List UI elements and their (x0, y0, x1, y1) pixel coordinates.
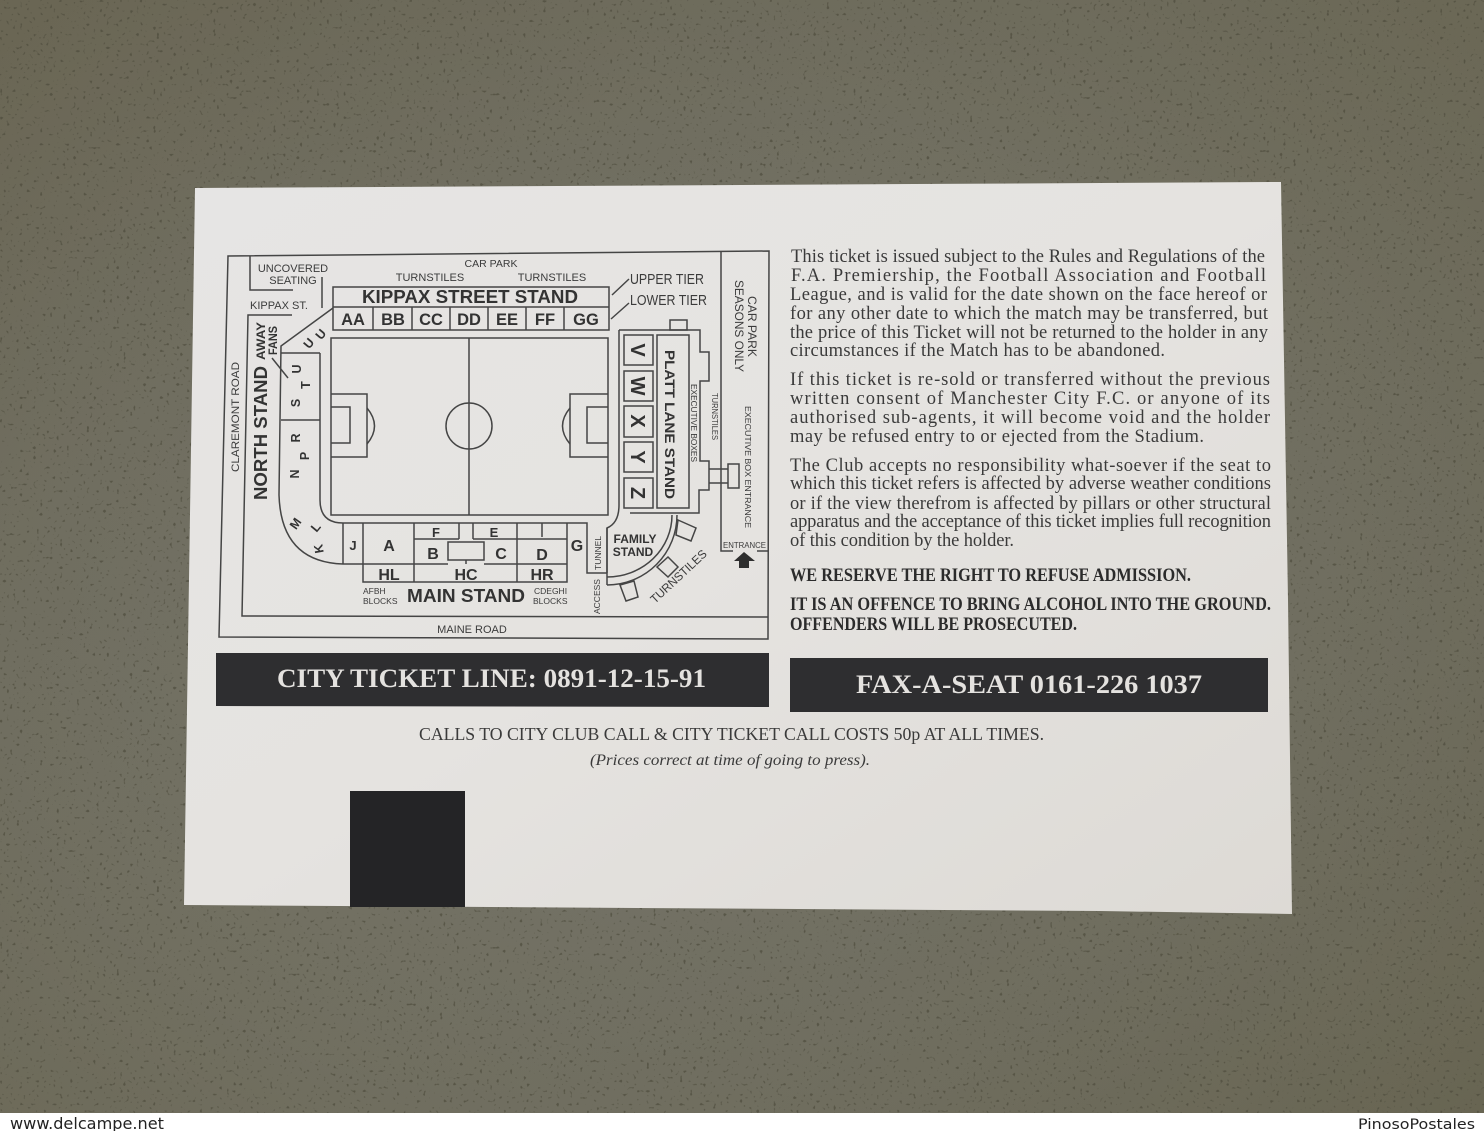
paragraph: rules and regulations: circumstances if the Match has to be abandoned. (790, 341, 1165, 361)
map labels: CAR PARK (465, 258, 517, 270)
Main Stand: HR (530, 567, 554, 584)
Kippax Street Stand: DD (457, 311, 481, 329)
icon: entrance arrow (734, 552, 755, 568)
Kippax Street Stand: EE (496, 311, 518, 329)
paragraph: rules and regulations: League, and is valid for the date shown on the face hereof or (790, 285, 1267, 305)
notice: alcohol: IT IS AN OFFENCE TO BRING ALCOHOL INTO THE GROUND. (790, 595, 1271, 615)
executive box entrance connector (709, 406, 753, 528)
North Stand: U (313, 326, 329, 342)
North Stand: T (299, 381, 313, 389)
paragraph: resale: written consent of Manchester City F.C. or anyone of its (790, 389, 1270, 409)
map labels: ENTRANCE (723, 541, 766, 550)
stadium map (219, 251, 769, 639)
North Stand: L (308, 520, 324, 535)
footer strip (0, 1113, 1484, 1131)
North Stand: R (289, 433, 303, 443)
North Stand: AWAY (254, 322, 268, 360)
Kippax Street Stand: AA (341, 311, 365, 329)
map labels: LOWER TIER (630, 293, 707, 309)
paragraph: rules and regulations: the price of this Ticket will not be returned to the holder in any (790, 323, 1269, 343)
paragraph: club responsibility: or if the view therefrom is affected by pillars or other structural (790, 494, 1271, 514)
Main Stand: ACCESS (592, 579, 602, 614)
Kippax Street Stand (333, 286, 609, 330)
paragraph: resale (790, 370, 1270, 447)
map labels: MAINE ROAD (437, 624, 507, 636)
Main Stand: CDEGHI (534, 586, 567, 596)
Platt Lane Stand: PLATT LANE STAND (662, 350, 678, 499)
Platt Lane Stand: V (626, 343, 648, 357)
paragraph: resale: authorised sub-agents, it will become void and the holder (790, 408, 1270, 428)
North Stand: N (288, 469, 302, 479)
banner: fax-a-seat (790, 658, 1268, 712)
map labels: TURNSTILES (518, 272, 586, 284)
paragraph: club responsibility: which this ticket refers is affected by adverse weather conditions (790, 474, 1271, 494)
Main Stand: J (349, 538, 357, 553)
Main Stand: F (432, 525, 440, 540)
call cost note: CALLS TO CITY CLUB CALL & CITY TICKET CALL COSTS 50p AT ALL TIMES. (419, 724, 1044, 744)
map labels: SEATING (269, 275, 317, 287)
Main Stand: AFBH (363, 586, 386, 596)
ticket card (184, 182, 1292, 914)
price note: (Prices correct at time of going to press). (590, 752, 870, 769)
Platt Lane Stand (607, 320, 719, 573)
Main Stand: G (571, 538, 583, 555)
notice: alcohol (790, 595, 1271, 635)
North Stand: FANS (266, 326, 280, 355)
Main Stand: HL (378, 567, 400, 584)
paragraph: rules and regulations: for any other date to which the match may be transferred, but (790, 304, 1269, 324)
notice: admission: WE RESERVE THE RIGHT TO REFUSE ADMISSION. (790, 566, 1191, 586)
banner: city ticket line (216, 653, 769, 707)
Main Stand: D (536, 547, 548, 564)
Family Stand: FAMILY (614, 532, 656, 546)
map labels: SEASONS ONLY (732, 280, 746, 372)
Main Stand: BLOCKS (533, 596, 568, 606)
paragraph: rules and regulations: F.A. Premiership, the Football Association and Football (791, 266, 1266, 286)
Platt Lane Stand: TURNSTILES (710, 393, 719, 440)
map labels: KIPPAX ST. (250, 300, 308, 312)
Family Stand: TURNSTILES (647, 547, 710, 606)
banner: city ticket line: CITY TICKET LINE: 0891-12-15-91 (277, 664, 706, 693)
map labels: TURNSTILES (396, 272, 464, 284)
North Stand: K (311, 543, 327, 554)
pitch (331, 338, 608, 515)
Kippax Street Stand: FF (535, 311, 555, 329)
Kippax Street Stand: CC (419, 311, 443, 329)
paragraph: rules and regulations (790, 247, 1269, 361)
terms and conditions text (790, 247, 1271, 635)
North Stand: P (298, 452, 312, 460)
Platt Lane Stand: Y (626, 450, 648, 464)
North Stand (251, 308, 607, 573)
Kippax Street Stand: BB (381, 311, 405, 329)
Platt Lane Stand: Z (626, 487, 648, 499)
map labels: CLAREMONT ROAD (230, 362, 242, 472)
Main Stand (343, 523, 603, 614)
paragraph: club responsibility (790, 456, 1271, 551)
banner: fax-a-seat: FAX-A-SEAT 0161-226 1037 (856, 670, 1202, 699)
North Stand: U (290, 364, 304, 374)
Kippax Street Stand: GG (573, 311, 599, 329)
notice: alcohol: OFFENDERS WILL BE PROSECUTED. (790, 615, 1077, 635)
executive box entrance connector: EXECUTIVE BOX ENTRANCE (743, 406, 753, 528)
Main Stand: A (383, 538, 395, 555)
map labels: UNCOVERED (258, 263, 328, 275)
Family Stand (607, 515, 710, 606)
Main Stand: HC (454, 567, 478, 584)
North Stand: NORTH STAND (251, 366, 271, 500)
Platt Lane Stand: X (626, 414, 648, 428)
map labels (230, 258, 766, 636)
black square (350, 791, 465, 907)
North Stand: U (301, 335, 317, 351)
Family Stand: STAND (613, 545, 654, 559)
map labels: UPPER TIER (630, 272, 704, 288)
paragraph: club responsibility: of this condition by the holder. (790, 531, 1014, 551)
Platt Lane Stand: EXECUTIVE BOXES (689, 384, 698, 462)
Main Stand: TUNNEL (593, 536, 603, 570)
North Stand: S (289, 399, 303, 407)
Main Stand: BLOCKS (363, 596, 398, 606)
map labels: CAR PARK (745, 296, 759, 357)
map outer boundary and roads (219, 251, 769, 639)
Main Stand: MAIN STAND (407, 585, 525, 606)
Main Stand: C (495, 546, 507, 563)
North Stand: M (287, 515, 304, 532)
paragraph: resale: If this ticket is re-sold or transferred without the previous (790, 370, 1270, 390)
Kippax Street Stand: KIPPAX STREET STAND (362, 286, 578, 307)
Platt Lane Stand: W (626, 377, 648, 396)
paragraph: club responsibility: apparatus and the acceptance of this ticket implies full recognition (790, 512, 1271, 532)
Main Stand: B (427, 546, 439, 563)
paragraph: resale: may be refused entry to or ejected from the Stadium. (790, 427, 1204, 447)
paragraph: rules and regulations: This ticket is issued subject to the Rules and Regulations of the (791, 247, 1265, 267)
Main Stand: E (490, 525, 499, 540)
paragraph: club responsibility: The Club accepts no responsibility what-soever if the seat to (790, 456, 1271, 476)
